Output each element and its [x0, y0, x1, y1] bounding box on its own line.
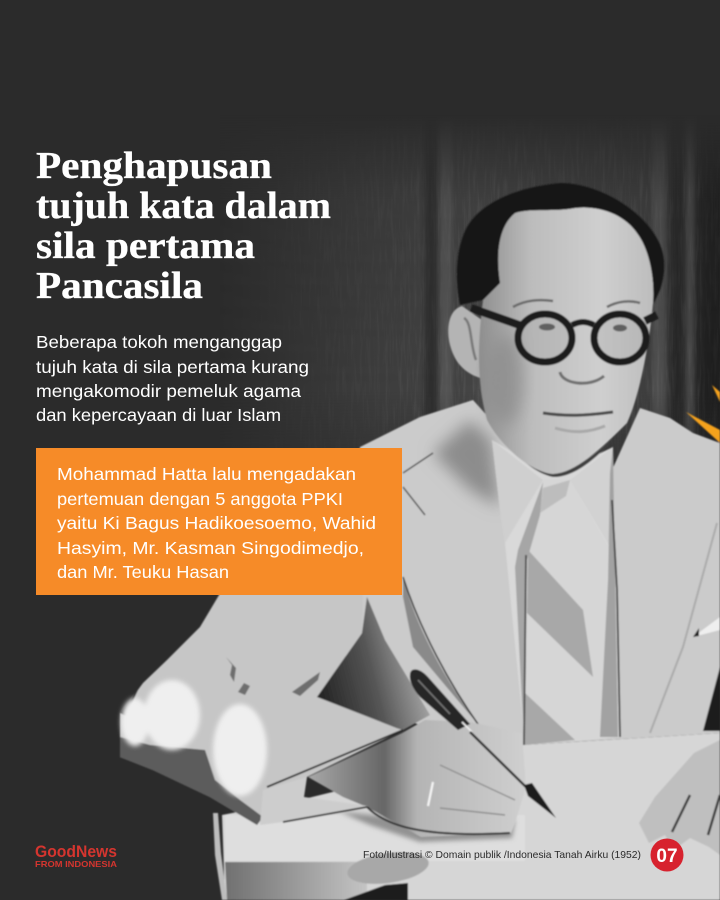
callout text: yaitu Ki Bagus Hadikoesoemo, Wahid: [57, 513, 376, 533]
jacket torso: [340, 400, 720, 745]
ear: [448, 306, 482, 378]
logo: GoodNews from Indonesia: GoodNews: [35, 843, 117, 861]
intro text block: tujuh kata di sila pertama kurang: [36, 357, 309, 377]
page number badge: [650, 838, 684, 872]
flower highlight blobs: [121, 680, 267, 796]
photo credit: Foto/Ilustrasi © Domain publik /Indonesia Tanah Airku (1952): [363, 849, 641, 861]
left sleeve: [120, 590, 403, 825]
right lapel line: [650, 523, 717, 733]
writing hand: [308, 720, 526, 837]
photo: Mohammad Hatta writing: [120, 183, 720, 900]
mouth: [543, 412, 613, 415]
logo: GoodNews from Indonesia: [35, 843, 117, 869]
intro text block: dan kepercayaan di luar Islam: [36, 405, 281, 425]
panel: orange callout: [36, 448, 402, 595]
eyes: [539, 324, 627, 332]
shirt cuff: [260, 777, 368, 825]
title: Pancasila: [36, 265, 203, 307]
sleeve dark underside: [120, 737, 263, 825]
face: [479, 207, 653, 474]
left lapel shadow: [403, 577, 477, 723]
intro text block: Beberapa tokoh menganggap: [36, 332, 282, 352]
right hand: [639, 740, 720, 855]
intro text block: mengakomodir pemeluk agama: [36, 381, 301, 401]
eyebrows: [513, 300, 640, 307]
page number badge: 07: [656, 846, 678, 867]
title: sila pertama: [36, 225, 255, 267]
right collar: [570, 447, 613, 545]
shadow under arm: [317, 597, 430, 730]
logo: GoodNews from Indonesia: FROM INDONESIA: [35, 859, 117, 869]
callout text: pertemuan dengan 5 anggota PPKI: [57, 489, 343, 509]
callout text: Hasyim, Mr. Kasman Singodimedjo,: [57, 538, 364, 558]
left collar: [492, 440, 543, 543]
curtain backdrop: [284, 136, 720, 460]
sleeve crease marks: [226, 657, 320, 696]
neck shadow: [478, 388, 612, 477]
title: [36, 145, 331, 307]
blotter knob: [345, 847, 431, 889]
title: Penghapusan: [36, 145, 272, 187]
icon: orange burst behind shoulder: [686, 385, 720, 443]
title: tujuh kata dalam: [36, 185, 331, 227]
shirt: [492, 440, 620, 745]
shirt edge band: [600, 447, 618, 737]
nose: [560, 372, 604, 383]
pocket square: [693, 617, 720, 637]
shadow below hand on paper: [340, 812, 515, 842]
hair: [457, 183, 664, 305]
paper and desk: [222, 733, 720, 900]
tie: [515, 480, 607, 745]
callout text: Mohammad Hatta lalu mengadakan: [57, 464, 356, 484]
callout text: dan Mr. Teuku Hasan: [57, 562, 229, 582]
glasses: [471, 308, 657, 362]
dark jacket corner: [703, 667, 720, 731]
callout text: [57, 464, 376, 582]
left lapel notch line: [403, 453, 433, 515]
intro text block: [36, 332, 309, 425]
cheek shading: [487, 335, 523, 425]
pen: [410, 669, 556, 818]
jacket shadow under chin: [433, 420, 500, 507]
